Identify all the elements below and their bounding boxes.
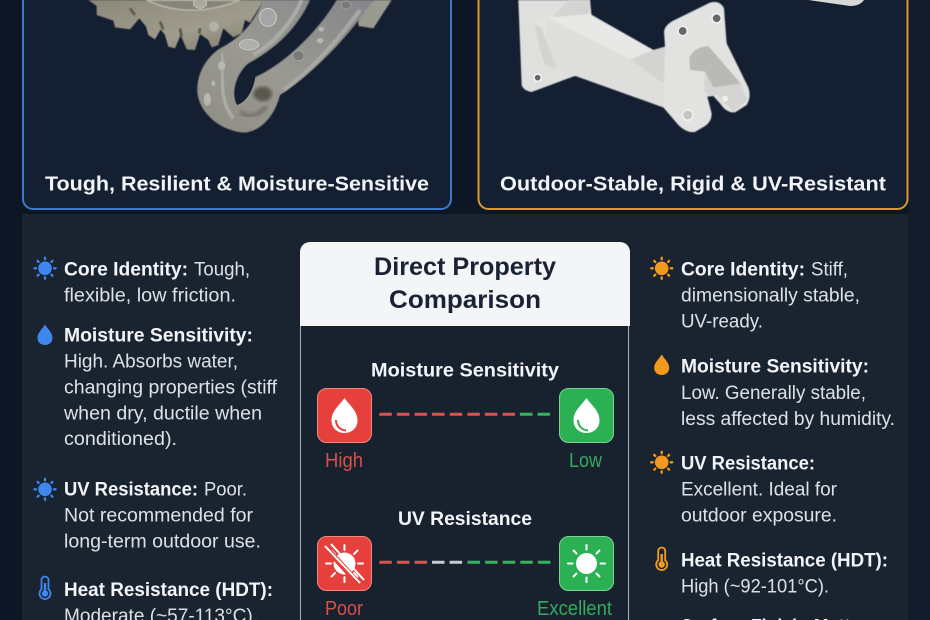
right margin strip <box>908 0 930 620</box>
panel header <box>300 242 630 326</box>
core identity text: flexible, low friction. <box>64 286 236 307</box>
icon: orange sun <box>651 258 672 279</box>
icon: orange drop <box>654 354 669 375</box>
moisture text: conditioned). <box>64 429 177 450</box>
scale line <box>379 413 551 416</box>
clip piece <box>358 0 392 28</box>
moisture text <box>681 357 895 430</box>
core identity text: dimensionally stable, <box>681 286 860 307</box>
hook <box>197 0 373 133</box>
row heading: Moisture Sensitivity <box>371 361 559 382</box>
heading: nylon summary: Tough, Resilient & Moisture-Sensitive <box>45 174 429 196</box>
moisture text <box>63 326 278 450</box>
gear <box>88 0 264 50</box>
heading: ASA summary: Outdoor-Stable, Rigid & UV-Resistant <box>500 174 886 196</box>
second bracket fragment <box>808 0 864 6</box>
core identity text: Tough, <box>194 260 250 281</box>
heat text <box>681 551 888 597</box>
heat text: Heat Resistance (HDT): <box>681 551 888 572</box>
UV text: outdoor exposure. <box>681 506 837 527</box>
moisture text: changing properties (stiff <box>64 377 278 398</box>
icon: blue drop <box>38 324 52 345</box>
panel body <box>300 300 628 620</box>
heat text <box>64 580 273 620</box>
moisture text: Moisture Sensitivity: <box>64 326 253 347</box>
core identity text: UV-ready. <box>681 311 763 332</box>
icon: poor UV <box>318 536 372 590</box>
bolt holes <box>534 14 721 120</box>
icon: excellent UV <box>560 536 614 590</box>
moisture text: when dry, ductile when <box>63 403 262 424</box>
image: wet gear and hook part <box>88 0 392 133</box>
arm and flange <box>535 0 750 132</box>
icon: low moisture <box>560 388 614 442</box>
panel title <box>374 253 556 314</box>
UV text: UV Resistance: <box>681 453 815 474</box>
moisture text: less affected by humidity. <box>681 409 895 430</box>
label: low: Low <box>569 450 602 472</box>
UV comparison <box>318 509 614 620</box>
panel: left material card <box>23 0 451 209</box>
icon: high moisture <box>318 388 372 442</box>
moisture comparison <box>318 361 614 472</box>
core identity text: Core Identity: <box>64 260 188 281</box>
UV text: Poor. <box>204 480 247 501</box>
heat text: High (~92-101°C). <box>681 576 829 597</box>
left properties list <box>34 258 278 620</box>
icon: blue thermometer <box>39 576 50 599</box>
core identity text: Core Identity: <box>681 260 805 281</box>
UV text <box>681 453 838 527</box>
moisture text: High. Absorbs water, <box>64 352 238 373</box>
lower content band <box>22 214 908 620</box>
panel: direct property comparison <box>300 242 630 620</box>
UV text: Excellent. Ideal for <box>681 480 838 501</box>
panel title: Comparison <box>389 286 541 314</box>
label: excellent: Excellent <box>537 598 612 620</box>
icon: blue UV sun <box>34 479 56 500</box>
UV text: Not recommended for <box>64 506 254 527</box>
icon: orange thermometer <box>656 548 667 570</box>
row heading: UV Resistance <box>398 509 532 530</box>
core identity text <box>681 260 860 332</box>
moisture text: Moisture Sensitivity: <box>681 357 869 378</box>
UV text: long-term outdoor use. <box>64 532 261 553</box>
panel: right material card <box>478 0 908 209</box>
heat text: Heat Resistance (HDT): <box>64 580 273 601</box>
moisture text: Low. Generally stable, <box>681 383 866 404</box>
UV text: UV Resistance: <box>64 480 198 501</box>
UV text <box>64 480 261 553</box>
panel title: Direct Property <box>374 253 556 281</box>
icon: blue sun <box>34 258 56 279</box>
label: poor: Poor <box>325 598 363 620</box>
core identity text <box>64 260 250 307</box>
right properties list <box>651 258 895 620</box>
core identity text: Stiff, <box>811 260 848 281</box>
image: white bracket <box>518 0 864 132</box>
icon: orange UV sun <box>651 452 672 473</box>
base plate <box>518 0 593 92</box>
label: high: High <box>325 450 363 472</box>
scale line <box>379 561 551 564</box>
